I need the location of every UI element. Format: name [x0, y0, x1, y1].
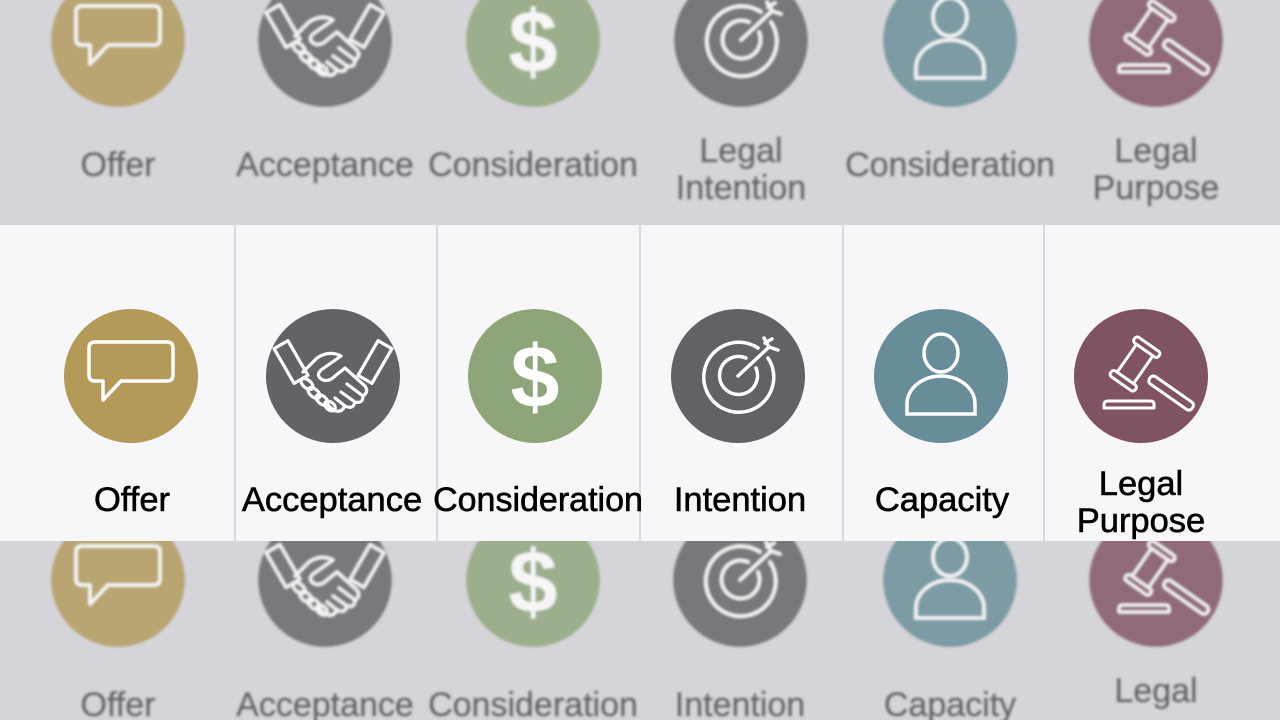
top blurred band: Offer: [81, 146, 155, 184]
top blurred band: Legal: [699, 132, 783, 170]
item: Acceptance: [242, 309, 422, 519]
icon: person: [874, 309, 1008, 443]
label: Consideration: Consideration: [433, 481, 643, 519]
label: Legal Purpose: Purpose: [1077, 502, 1205, 540]
item: Consideration: [433, 309, 643, 519]
top blurred band: Intention: [676, 169, 806, 207]
label: Offer: Offer: [94, 481, 170, 519]
icon: dollar: $: [511, 327, 559, 426]
top blurred band: [0, 0, 1280, 225]
item: Offer: [64, 309, 198, 519]
icon: target: [671, 309, 805, 443]
top blurred band: Purpose: [1093, 169, 1219, 207]
label: Capacity: Capacity: [875, 481, 1010, 519]
item: Intention: [671, 309, 806, 519]
icon: dollar: [468, 309, 602, 443]
icon: speech bubble: [64, 309, 198, 443]
item: Legal Purpose: [1074, 309, 1208, 540]
bottom blurred band: [0, 513, 1280, 720]
label: Legal Purpose: Legal: [1099, 465, 1183, 503]
item: Capacity: [874, 309, 1010, 519]
top blurred band: Consideration: [428, 146, 638, 184]
main band: [0, 225, 1280, 541]
bottom blurred band: $: [509, 532, 557, 631]
top blurred band: Acceptance: [236, 146, 414, 184]
label: Acceptance: Acceptance: [242, 481, 422, 519]
icon: gavel: [1074, 309, 1208, 443]
icon: handshake: [266, 309, 400, 443]
top blurred band: Consideration: [845, 146, 1055, 184]
label: Intention: Intention: [674, 481, 806, 519]
bottom blurred band: Legal: [1114, 672, 1198, 710]
top blurred band: Legal: [1114, 132, 1198, 170]
